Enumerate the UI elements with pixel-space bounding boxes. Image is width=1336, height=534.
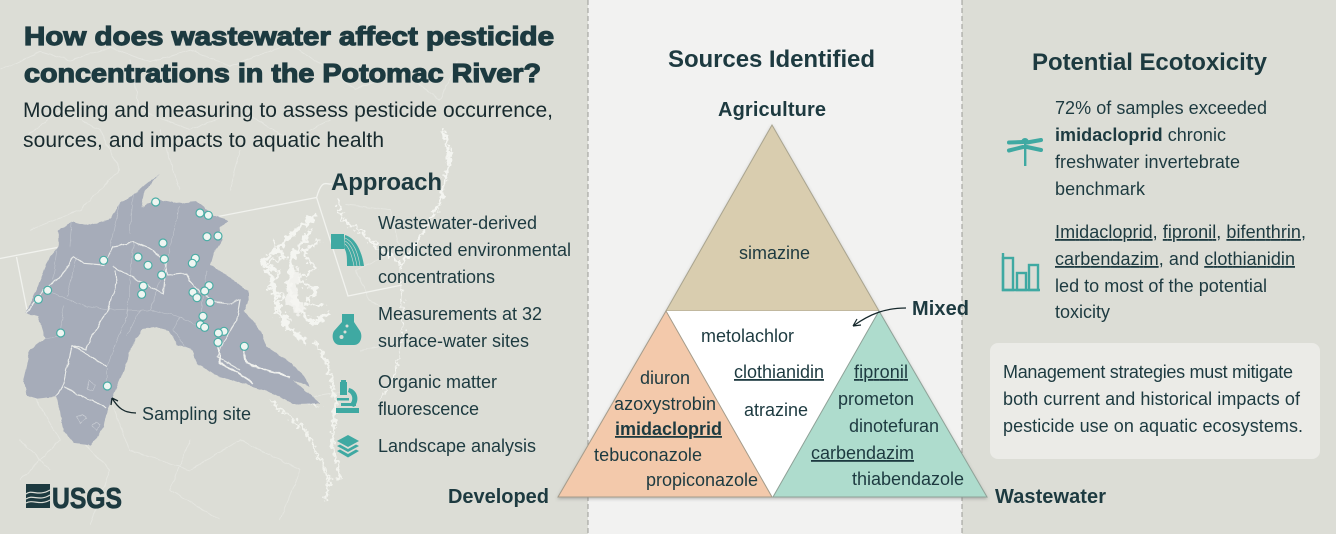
background state and county lines (0, 44, 458, 525)
mixed compounds (701, 326, 824, 420)
wastewater compounds: prometon (838, 389, 914, 409)
triangle: wastewater (773, 311, 987, 497)
approach item: surface-water measurements: surface-water sites (378, 331, 529, 351)
wastewater compounds: dinotefuran (849, 416, 939, 436)
icon: bar chart (1003, 253, 1040, 290)
approach item: fluorescence: fluorescence (378, 399, 479, 419)
label: mixed with arrow: Mixed (912, 298, 969, 320)
label: agriculture: Agriculture (718, 99, 826, 121)
state borders (0, 184, 402, 310)
heading: sources identified: Sources Identified (668, 46, 875, 73)
icon: layers (337, 435, 359, 458)
watershed fill and rivers (23, 174, 320, 445)
callout: management strategies: Management strategies must mitigate (1003, 362, 1293, 382)
approach item: wastewater predictions: concentrations (378, 267, 495, 287)
ecotoxicity finding: imidacloprid benchmark: 72% of samples exceeded (1055, 98, 1267, 118)
icon: flask (333, 314, 361, 345)
callout: management strategies (990, 343, 1320, 459)
map: Potomac River watershed (0, 44, 458, 525)
developed compounds: imidacloprid (615, 419, 722, 439)
triangle: agriculture (666, 125, 879, 311)
ecotoxicity finding: imidacloprid benchmark: freshwater invertebrate (1055, 152, 1240, 172)
icon: microscope (336, 380, 359, 413)
ecotoxicity finding: leading compounds: Imidacloprid, fipronil, bifenthrin, (1055, 222, 1306, 242)
developed compounds: propiconazole (646, 470, 758, 490)
USGS logo: USGS (52, 483, 122, 515)
callout: management strategies: pesticide use on aquatic ecosystems. (1003, 416, 1303, 436)
ecotoxicity finding: imidacloprid benchmark (1009, 98, 1267, 199)
approach heading: Approach (331, 169, 442, 196)
subtitle: sources, and impacts to aquatic health (23, 129, 384, 152)
wastewater compounds: thiabendazole (852, 469, 964, 489)
agriculture compounds: simazine (739, 243, 810, 263)
callout: management strategies: both current and historical impacts of (1003, 389, 1301, 409)
approach item: wastewater predictions (331, 213, 571, 287)
approach item: surface-water measurements (333, 304, 542, 351)
label: mixed with arrow (853, 298, 969, 326)
sampling site callout: Sampling site (142, 404, 251, 424)
triangle diagram (558, 125, 987, 497)
approach item: wastewater predictions: Wastewater-derived (378, 213, 537, 233)
title: How does wastewater affect pesticide (24, 21, 554, 51)
ecotoxicity finding: leading compounds: carbendazim, and clothianidin (1055, 249, 1295, 269)
title (24, 21, 554, 88)
developed compounds: diuron (640, 368, 690, 388)
heading: potential ecotoxicity: Potential Ecotoxicity (1032, 49, 1268, 76)
developed compounds: azoxystrobin (614, 394, 716, 414)
triangle: developed (558, 311, 772, 497)
mixed compounds: atrazine (744, 400, 808, 420)
Chesapeake Bay and coastline (243, 130, 450, 500)
approach item: landscape analysis: Landscape analysis (378, 436, 536, 456)
subtitle (23, 99, 553, 152)
approach item: fluorescence: Organic matter (378, 372, 497, 392)
icon: wastewater outfall (331, 234, 364, 266)
ecotoxicity finding: leading compounds: toxicity (1055, 302, 1110, 322)
subtitle: Modeling and measuring to assess pesticide occurrence, (23, 99, 553, 122)
ecotoxicity finding: leading compounds (1003, 222, 1306, 322)
label: wastewater: Wastewater (995, 486, 1106, 508)
ecotoxicity finding: imidacloprid benchmark: benchmark (1055, 179, 1146, 199)
approach item: fluorescence (336, 372, 497, 419)
label: developed: Developed (448, 486, 549, 508)
ecotoxicity finding: imidacloprid benchmark: imidacloprid chronic (1055, 125, 1226, 145)
wastewater compounds: carbendazim (811, 443, 914, 463)
watershed area with rivers and sites (23, 174, 320, 445)
panel: sources identified (588, 0, 962, 534)
wastewater compounds: fipronil (854, 362, 908, 382)
approach item: surface-water measurements: Measurements at 32 (378, 304, 542, 324)
triangle: mixed (666, 311, 879, 497)
wastewater compounds (811, 362, 964, 489)
ecotoxicity finding: leading compounds: led to most of the potential (1055, 276, 1267, 296)
sampling site markers (34, 198, 248, 390)
developed compounds: tebuconazole (594, 445, 702, 465)
icon: dragonfly (1009, 138, 1041, 166)
sampling site callout (111, 398, 251, 424)
title: concentrations in the Potomac River? (24, 58, 541, 88)
approach item: wastewater predictions: predicted environmental (378, 240, 571, 260)
developed compounds (594, 368, 758, 490)
USGS logo (26, 483, 122, 515)
mixed compounds: clothianidin (734, 362, 824, 382)
mixed compounds: metolachlor (701, 326, 794, 346)
